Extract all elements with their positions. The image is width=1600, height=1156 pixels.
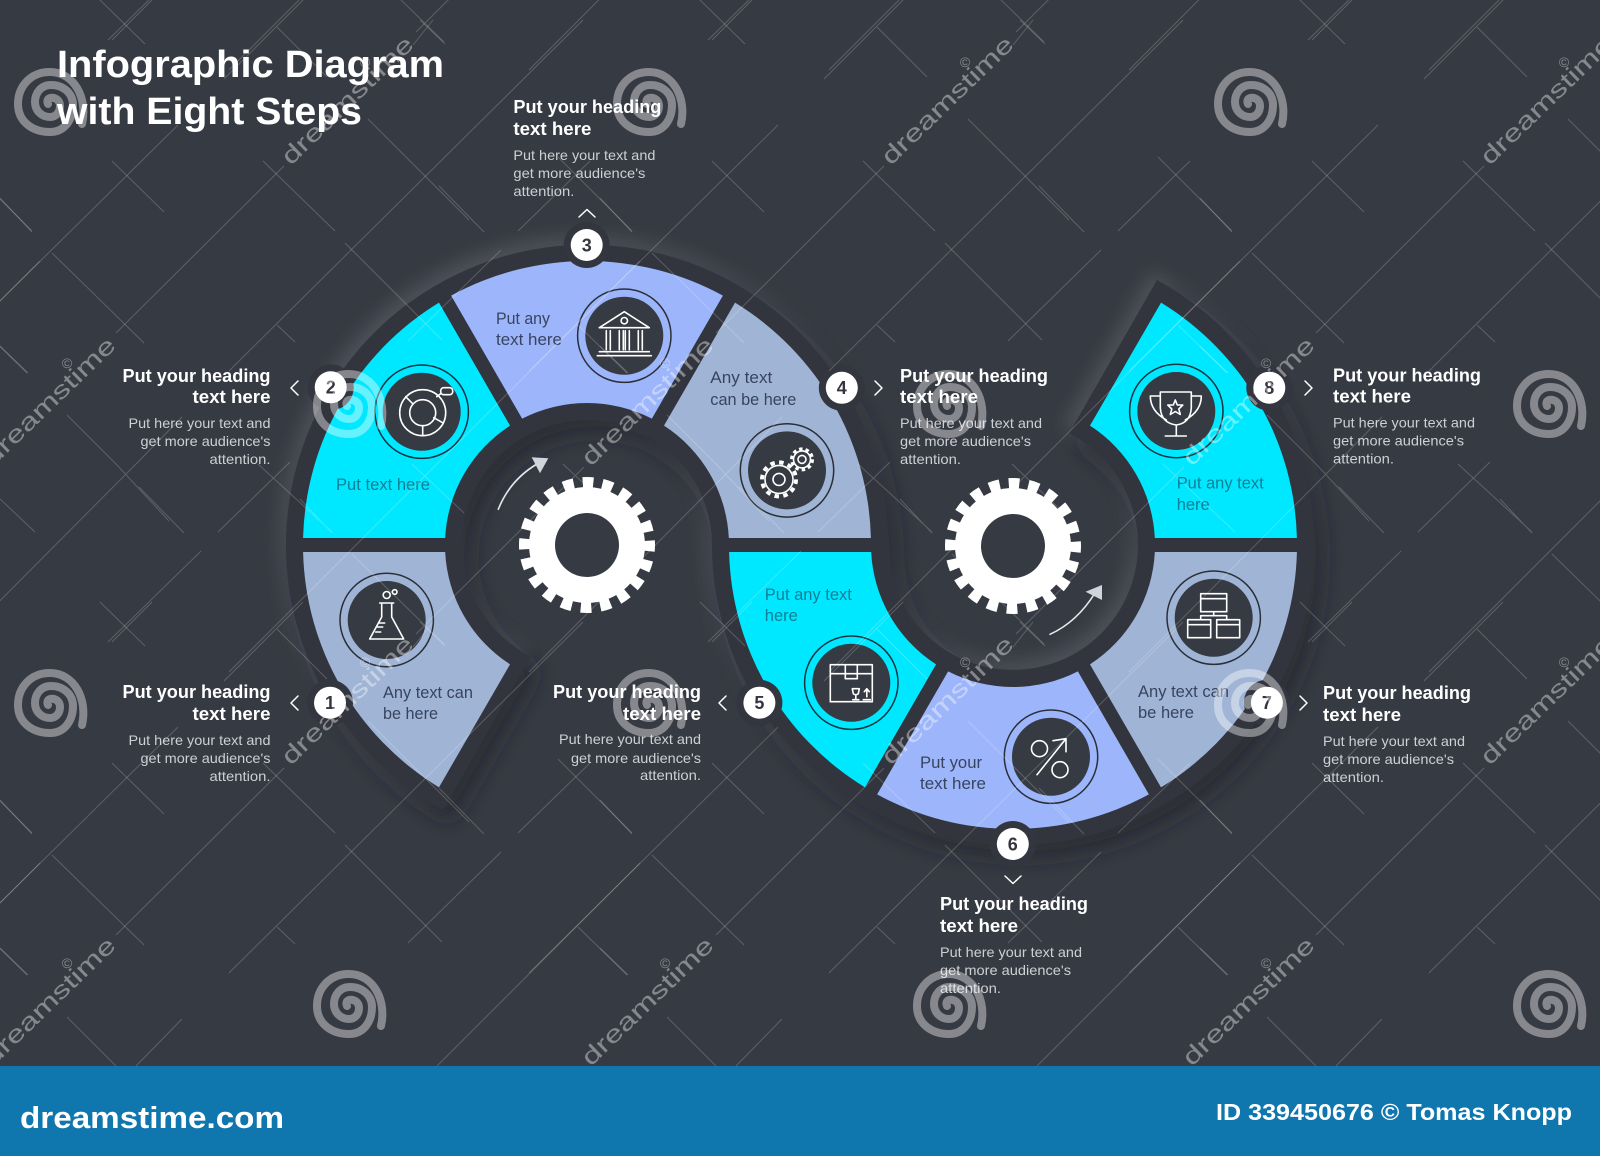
text block 8: Put here your text and bbox=[1333, 415, 1475, 431]
text block 5: Put here your text and bbox=[559, 731, 701, 747]
text block 3: Put your heading bbox=[513, 97, 661, 117]
text block 5: get more audience's bbox=[571, 750, 701, 766]
icon: bank building bbox=[578, 289, 671, 382]
panel: segment 7 bbox=[1058, 490, 1365, 787]
watermark text: © bbox=[1261, 355, 1272, 371]
watermark text: © bbox=[660, 955, 671, 971]
watermark text: dreamstime bbox=[1177, 932, 1320, 1071]
badge 6 bbox=[990, 821, 1036, 867]
text block 7: Put your heading bbox=[1323, 683, 1471, 703]
text: segment 5: Put any text bbox=[765, 585, 852, 604]
text block 8 bbox=[1333, 366, 1481, 466]
icon: percent arrow bbox=[1004, 710, 1098, 803]
text block 2 bbox=[122, 366, 270, 467]
gear: left hub bbox=[521, 479, 653, 611]
watermark text: © bbox=[360, 54, 371, 70]
icon: flask bbox=[340, 573, 433, 667]
text block 6: Put here your text and bbox=[940, 944, 1082, 960]
text block 6 bbox=[940, 894, 1088, 996]
badge 5: 5 bbox=[754, 693, 764, 713]
text block 2: text here bbox=[192, 387, 270, 407]
badge 7: 7 bbox=[1262, 693, 1272, 713]
gear: right hub bbox=[947, 480, 1079, 612]
title: with Eight Steps bbox=[56, 91, 362, 133]
icon: parcel box bbox=[805, 636, 898, 729]
text block 2: Put here your text and bbox=[128, 415, 270, 431]
watermark text: © bbox=[62, 955, 73, 971]
text block 2: Put your heading bbox=[122, 366, 270, 386]
text: segment 3: text here bbox=[496, 330, 562, 349]
text: segment 7: Any text can bbox=[1138, 682, 1229, 701]
text block 1 bbox=[122, 682, 270, 784]
text block 5: Put your heading bbox=[553, 682, 701, 702]
text block 7 bbox=[1323, 683, 1471, 785]
panel: segment 1 bbox=[303, 552, 510, 787]
badge 3 bbox=[564, 222, 610, 268]
badge 8: 8 bbox=[1264, 378, 1274, 398]
watermark text: dreamstime bbox=[876, 31, 1019, 170]
text block 8: Put your heading bbox=[1333, 366, 1481, 386]
watermark text: © bbox=[1559, 654, 1570, 670]
arrow: right hub bbox=[1050, 585, 1102, 634]
panel: segment 3 bbox=[416, 178, 723, 475]
badge 6: 6 bbox=[1008, 834, 1018, 854]
text block 8: attention. bbox=[1333, 450, 1394, 466]
badge 3: 3 bbox=[582, 235, 592, 255]
text block 3: attention. bbox=[513, 183, 574, 199]
watermark text: © bbox=[960, 54, 971, 70]
text block 6: get more audience's bbox=[940, 962, 1071, 978]
badge 4 bbox=[819, 365, 865, 411]
text: segment 4: can be here bbox=[710, 390, 796, 409]
footer credit text: ID 339450676 © Tomas Knopp bbox=[1216, 1099, 1572, 1125]
text block 2: attention. bbox=[210, 451, 270, 467]
panel: segment 6 bbox=[877, 615, 1184, 912]
watermark text: © bbox=[62, 355, 73, 371]
text: segment 3: Put any bbox=[496, 309, 550, 328]
icon: two gears bbox=[740, 424, 834, 517]
badge 5 bbox=[736, 680, 782, 726]
watermark text: dreamstime bbox=[1475, 31, 1600, 170]
text block 1: Put your heading bbox=[122, 682, 270, 702]
panel: segment 4 bbox=[664, 303, 871, 538]
text block 8: get more audience's bbox=[1333, 433, 1464, 449]
text: segment 8: here bbox=[1177, 495, 1210, 514]
text block 8: text here bbox=[1333, 387, 1411, 407]
text block 5: text here bbox=[623, 704, 701, 724]
watermark text: © bbox=[1261, 955, 1272, 971]
text: segment 7: be here bbox=[1138, 703, 1194, 722]
text block 3: get more audience's bbox=[513, 165, 645, 181]
badge 1: 1 bbox=[325, 693, 335, 713]
text block 7: Put here your text and bbox=[1323, 733, 1465, 749]
badge 2: 2 bbox=[326, 378, 336, 398]
text block 5 bbox=[553, 682, 701, 783]
text: segment 6: Put your bbox=[920, 753, 982, 772]
text block 4: get more audience's bbox=[900, 433, 1031, 449]
watermark text: dreamstime bbox=[276, 31, 419, 170]
badge 1 bbox=[307, 680, 353, 726]
text block 7: text here bbox=[1323, 705, 1401, 725]
icon: org chart bbox=[1167, 571, 1260, 664]
panel: segment 2 bbox=[235, 303, 542, 600]
text block 3 bbox=[513, 97, 661, 199]
text: segment 8: Put any text bbox=[1177, 474, 1264, 493]
text block 1: attention. bbox=[210, 768, 270, 784]
chevrons bbox=[291, 210, 1312, 884]
badge 7 bbox=[1244, 680, 1290, 726]
text block 4: Put your heading bbox=[900, 366, 1048, 386]
text: segment 1: be here bbox=[383, 704, 438, 723]
S-shaped base band bbox=[286, 245, 1314, 845]
icon: trophy bbox=[1130, 364, 1223, 458]
watermark text: dreamstime bbox=[1475, 631, 1600, 770]
icon: ring chart bbox=[375, 365, 468, 458]
badge 2 bbox=[308, 364, 354, 410]
text block 4: text here bbox=[900, 387, 978, 407]
text block 3: text here bbox=[513, 119, 591, 139]
text block 4: Put here your text and bbox=[900, 415, 1042, 431]
text block 6: text here bbox=[940, 916, 1018, 936]
watermark text: dreamstime bbox=[576, 332, 719, 471]
text: segment 6: text here bbox=[920, 774, 986, 793]
watermark text: © bbox=[660, 355, 671, 371]
panel: segment 8 bbox=[1090, 303, 1297, 538]
badge 8 bbox=[1246, 365, 1292, 411]
badge 4: 4 bbox=[837, 378, 847, 398]
text block 4: attention. bbox=[900, 451, 961, 467]
watermark text: dreamstime bbox=[1177, 332, 1320, 471]
watermark text: © bbox=[960, 654, 971, 670]
text block 4 bbox=[900, 366, 1048, 467]
text block 5: attention. bbox=[640, 767, 701, 783]
watermark text: dreamstime bbox=[276, 631, 419, 770]
title: Infographic Diagram bbox=[57, 44, 444, 86]
text: segment 1: Any text can bbox=[383, 683, 473, 702]
text block 6: attention. bbox=[940, 980, 1001, 996]
footer banner bbox=[0, 1066, 1600, 1156]
text: segment 4: Any text bbox=[710, 368, 773, 387]
footer logo text: dreamstime.com bbox=[20, 1100, 284, 1135]
watermark text: © bbox=[360, 654, 371, 670]
watermark text: dreamstime bbox=[876, 631, 1019, 770]
watermark text: dreamstime bbox=[576, 932, 719, 1071]
text block 7: attention. bbox=[1323, 769, 1384, 785]
text block 6: Put your heading bbox=[940, 894, 1088, 914]
text: segment 2: Put text here bbox=[336, 475, 430, 494]
text block 1: get more audience's bbox=[140, 750, 270, 766]
watermark text: © bbox=[1559, 54, 1570, 70]
arrow: left hub bbox=[498, 457, 548, 509]
text block 3: Put here your text and bbox=[513, 147, 655, 163]
text block 2: get more audience's bbox=[140, 433, 270, 449]
text block 1: Put here your text and bbox=[128, 732, 270, 748]
text: segment 5: here bbox=[765, 606, 798, 625]
panel: segment 5 bbox=[729, 552, 936, 787]
text block 1: text here bbox=[192, 704, 270, 724]
text block 7: get more audience's bbox=[1323, 751, 1454, 767]
